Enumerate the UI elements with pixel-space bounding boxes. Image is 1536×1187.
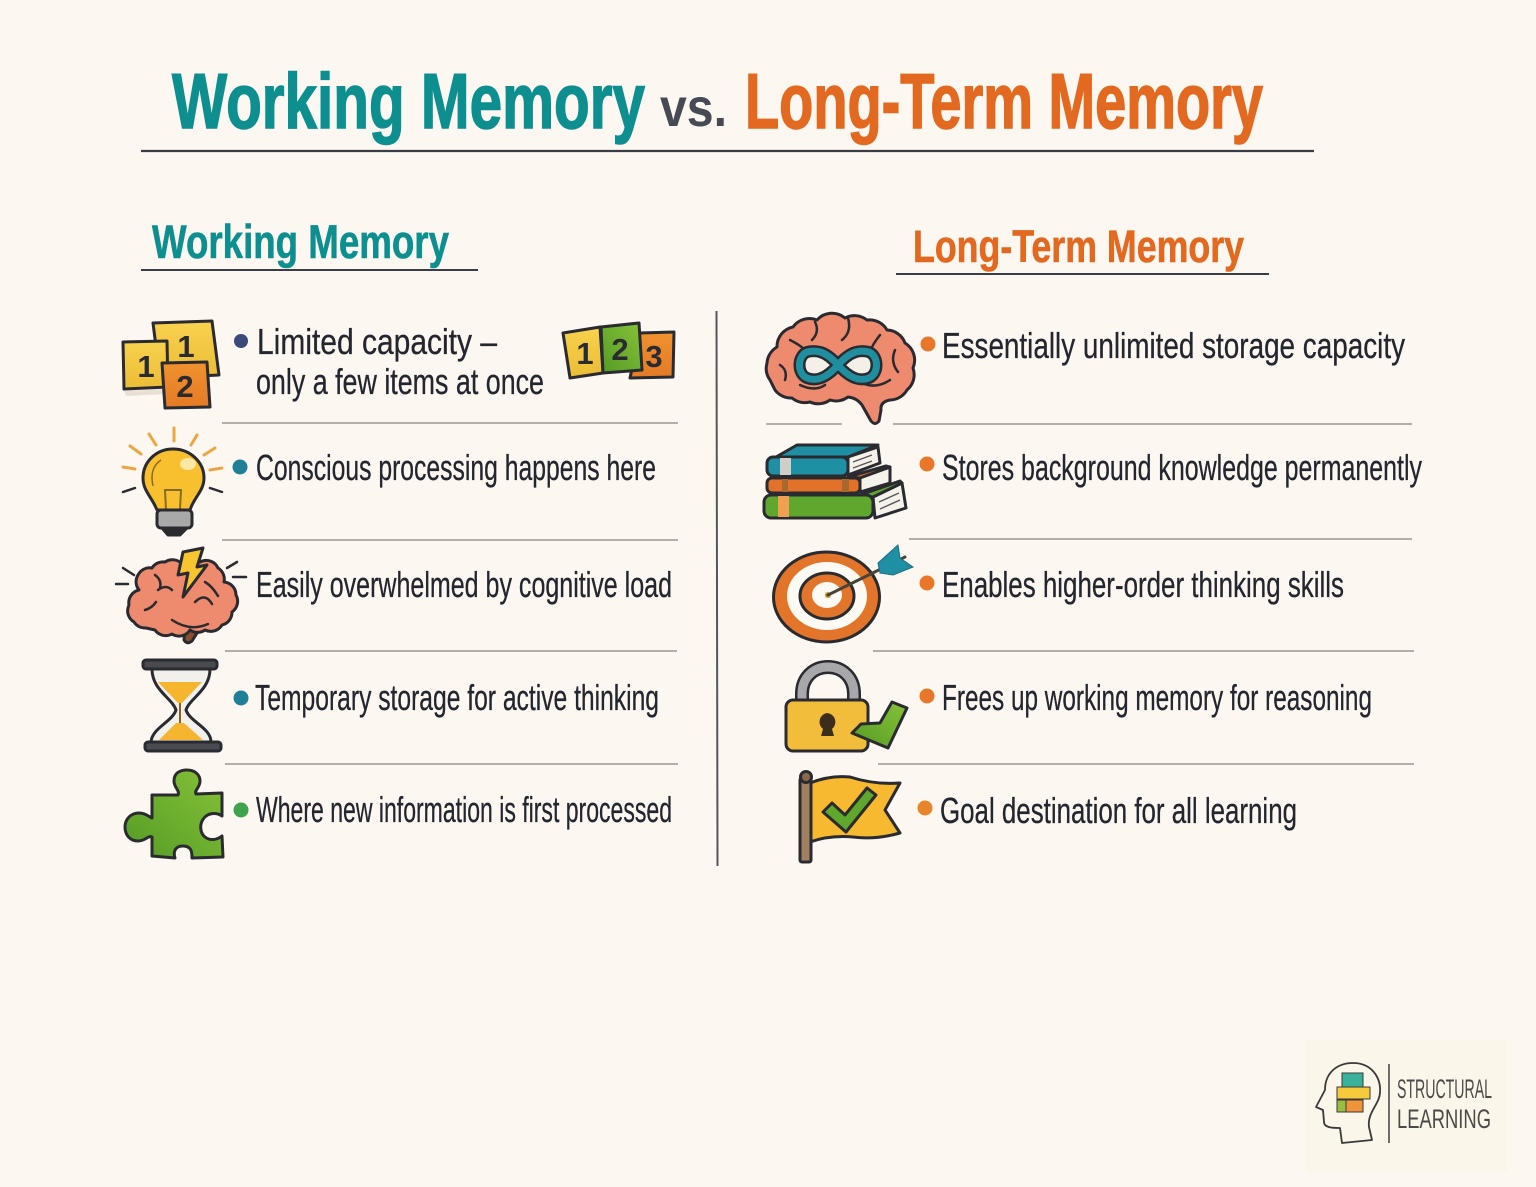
divider xyxy=(222,539,678,541)
icon: puzzle piece xyxy=(125,770,223,858)
divider xyxy=(225,650,677,652)
bullet text: conscious processing xyxy=(232,447,656,488)
text: easily overwhelmed: Easily overwhelmed by cognitive load xyxy=(256,564,672,605)
icon: overloaded brain with lightning xyxy=(116,548,246,643)
divider xyxy=(222,422,678,424)
divider xyxy=(225,763,678,765)
logo: structural learning xyxy=(1306,1040,1507,1172)
heading: working memory: Working Memory xyxy=(152,215,449,268)
icon: sticky notes 1 1 2 xyxy=(123,321,219,408)
bullet text: conscious processing: Conscious processing happens here xyxy=(256,447,656,488)
bullet text: limited capacity: Limited capacity – xyxy=(257,321,497,362)
title: Long-Term Memory xyxy=(745,57,1263,145)
logo: structural learning: LEARNING xyxy=(1397,1104,1491,1134)
icon: target with arrow xyxy=(774,545,913,642)
bullet text: temporary storage: Temporary storage for active thinking xyxy=(255,677,659,718)
icon: numbered cards 1 2 3: 3 xyxy=(645,339,663,374)
divider xyxy=(873,650,1414,652)
divider xyxy=(909,538,1412,540)
panel: working memory xyxy=(116,215,678,858)
icon: brain with infinity symbol xyxy=(766,313,915,424)
title xyxy=(172,57,1263,145)
bullet text: goal destination xyxy=(918,790,1297,831)
title underline xyxy=(141,150,1314,152)
icon: stack of books xyxy=(764,445,906,518)
divider xyxy=(766,423,1412,425)
centre divider xyxy=(716,311,718,866)
bullet text: temporary storage xyxy=(234,677,659,718)
bullet text: higher-order thinking: Enables higher-order thinking skills xyxy=(942,564,1344,605)
bullet text: goal destination: Goal destination for all learning xyxy=(940,790,1297,831)
icon: numbered cards 1 2 3: 1 xyxy=(576,336,594,371)
logo head icon xyxy=(1316,1063,1380,1143)
bullet text: higher-order thinking xyxy=(920,564,1344,605)
icon: numbered cards 1 2 3: 2 xyxy=(611,332,629,367)
bullet text: limited capacity: only a few items at once xyxy=(256,361,544,402)
bullet text: where new information xyxy=(234,789,672,830)
bullet text: frees up working memory xyxy=(920,677,1372,718)
icon: sticky notes 1 1 2: 2 xyxy=(176,369,194,404)
divider xyxy=(878,763,1414,765)
icon: hourglass xyxy=(143,660,221,751)
bullet text: where new information: Where new information is first processed xyxy=(256,789,672,830)
icon: sticky notes 1 1 2: 1 xyxy=(177,329,195,364)
bullet text: limited capacity xyxy=(234,321,544,402)
panel: long-term memory xyxy=(764,221,1422,862)
heading: long-term memory: Long-Term Memory xyxy=(913,221,1244,272)
title: vs. xyxy=(660,78,727,138)
icon: sticky notes 1 1 2: 1 xyxy=(137,349,155,384)
icon: numbered cards 1 2 3 xyxy=(563,323,674,378)
icon: flag with check mark xyxy=(800,772,900,862)
title: Working Memory xyxy=(172,57,645,145)
icon: light bulb xyxy=(123,428,222,535)
bullet text: unlimited storage: Essentially unlimited storage capacity xyxy=(942,325,1405,366)
icon: padlock with check mark xyxy=(786,667,907,751)
